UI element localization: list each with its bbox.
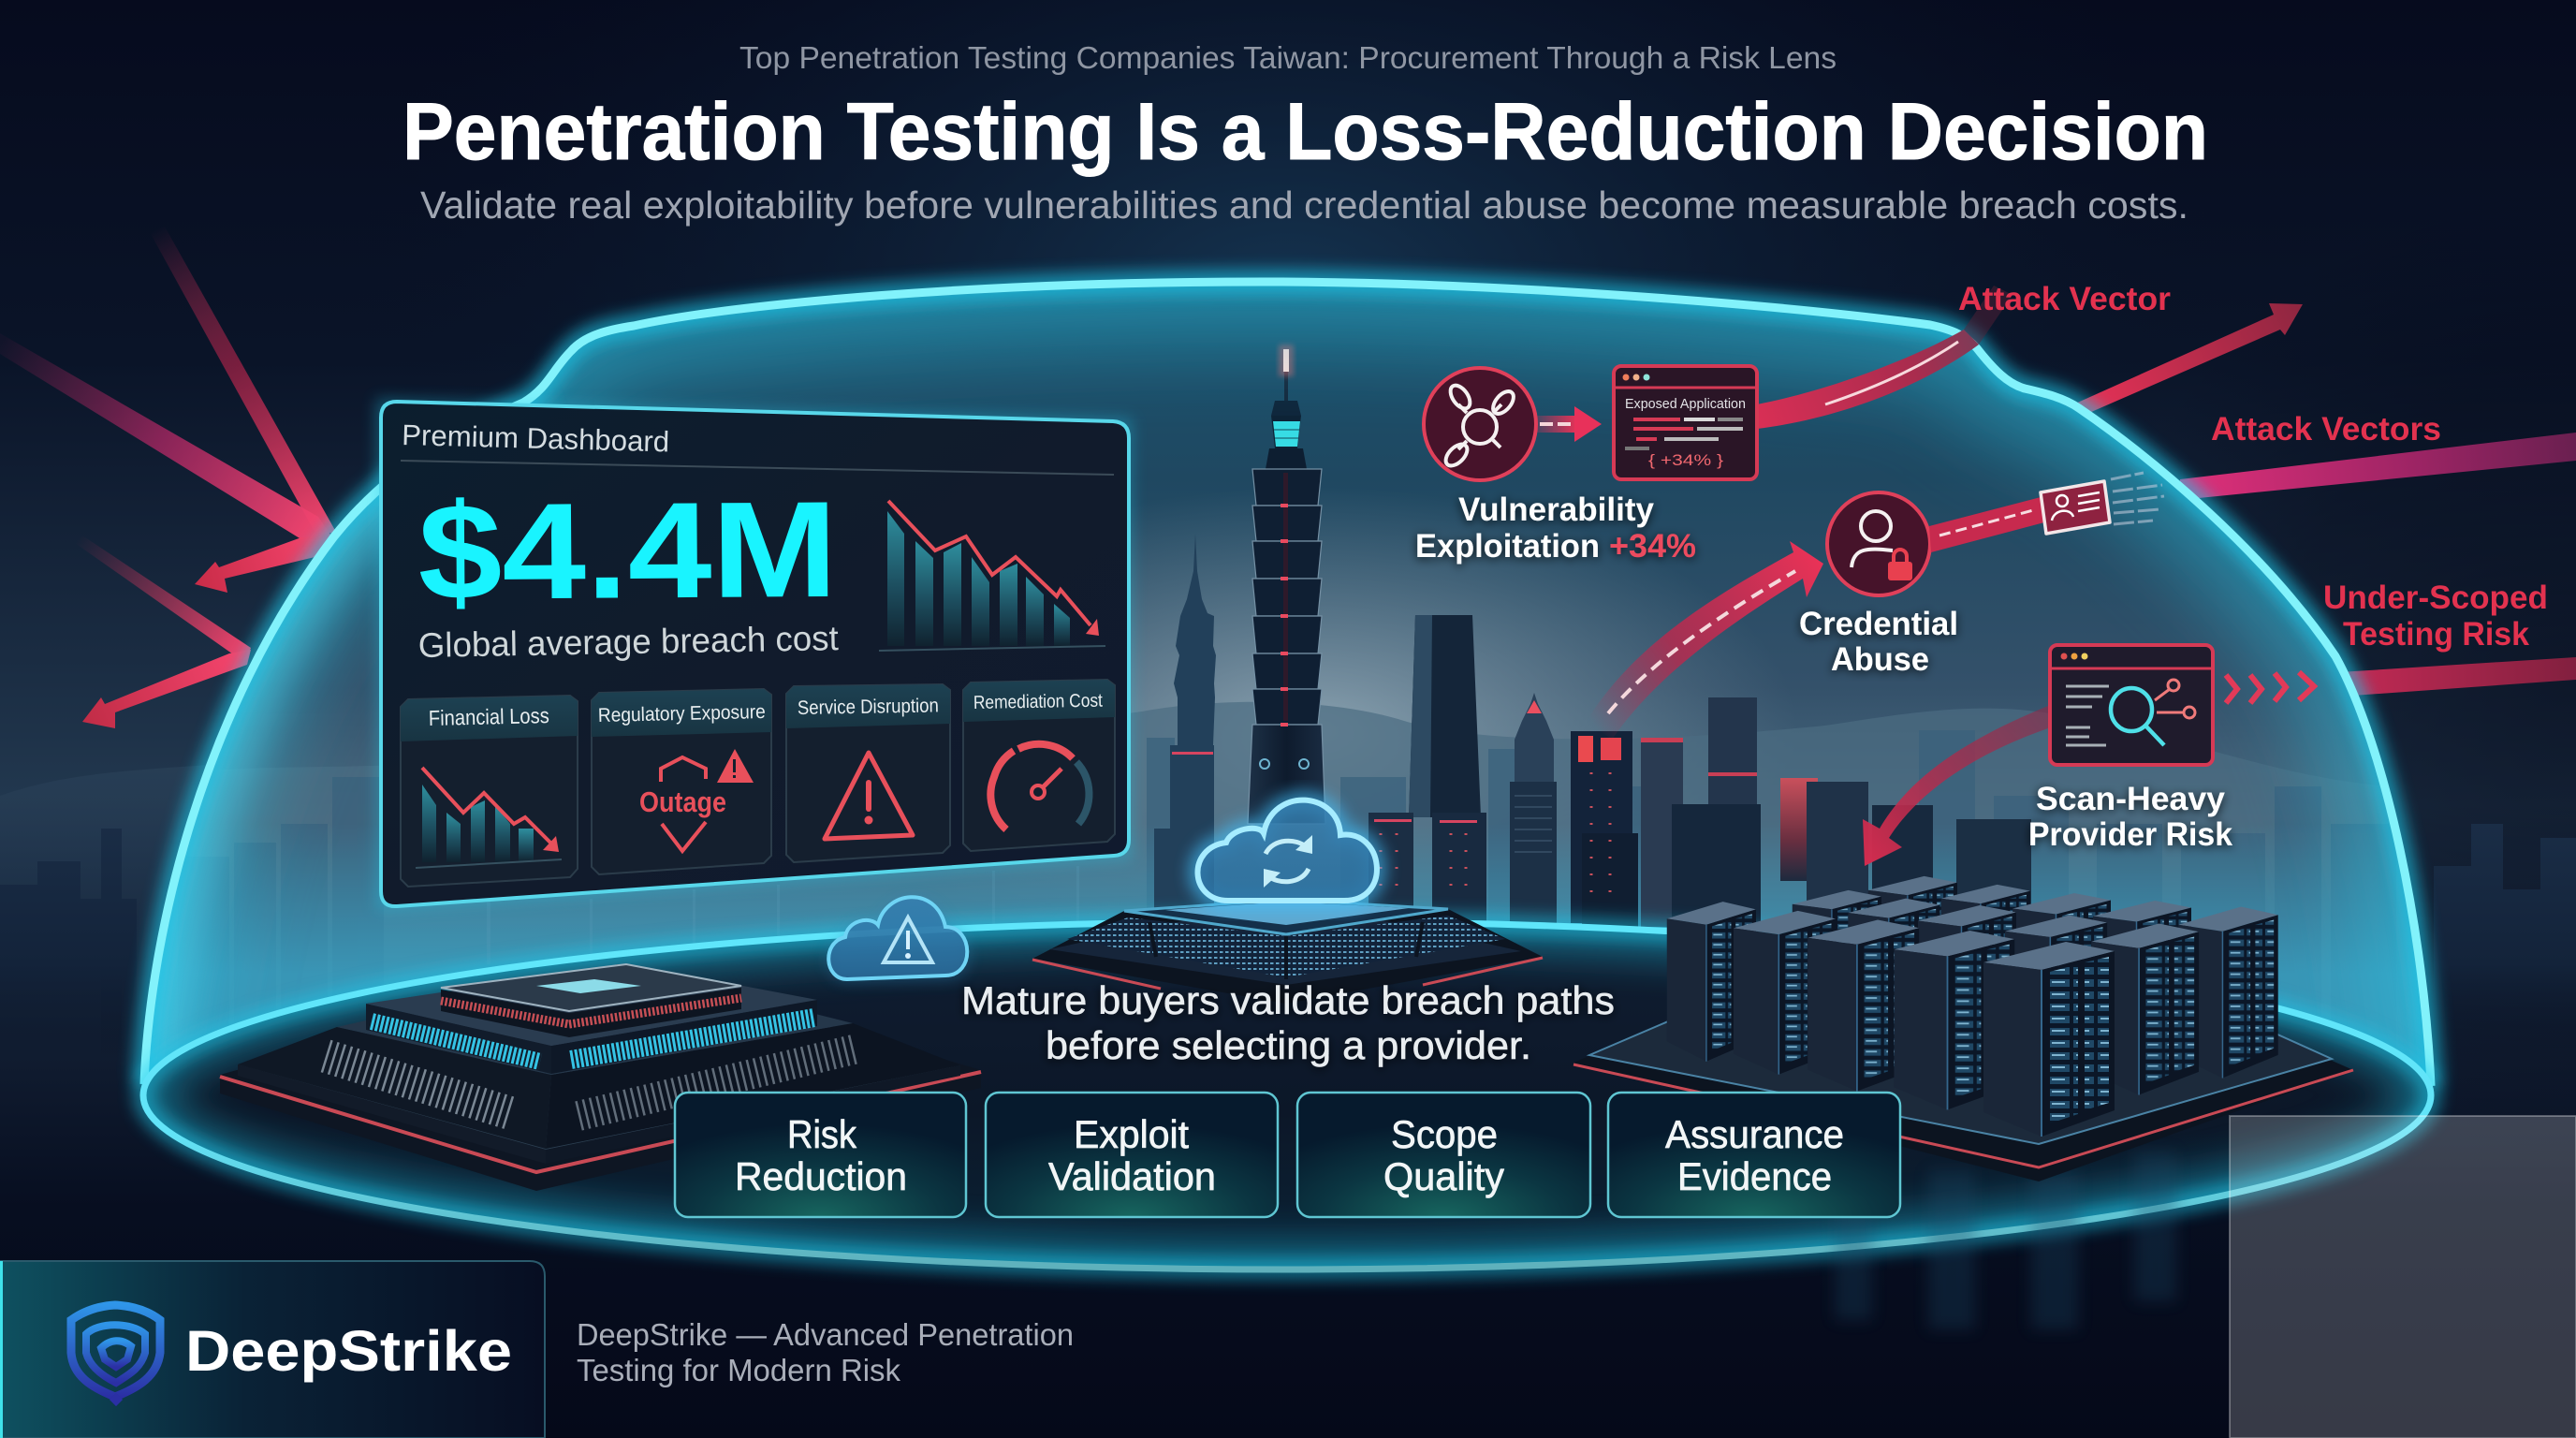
right city buildings bbox=[1368, 615, 2031, 927]
platform: processor chip bbox=[220, 964, 981, 1191]
button: risk reduction: Risk bbox=[787, 1112, 857, 1156]
card: financial loss: Financial Loss bbox=[429, 703, 549, 730]
button: scope quality bbox=[1297, 1093, 1590, 1217]
button: risk reduction: Reduction bbox=[735, 1154, 907, 1198]
button: scope quality: Quality bbox=[1383, 1154, 1504, 1198]
header text bbox=[402, 40, 2208, 227]
card: remediation cost: Remediation Cost bbox=[973, 691, 1103, 713]
label: attack vector: Attack Vector bbox=[1958, 281, 2171, 317]
criteria buttons bbox=[675, 1093, 1900, 1217]
card: regulatory exposure: Regulatory Exposure bbox=[598, 701, 766, 726]
mountains bbox=[1056, 702, 2265, 906]
label: scan-heavy provider risk bbox=[2028, 781, 2233, 853]
logo shield bbox=[71, 1305, 160, 1406]
card: service disruption: Service Disruption bbox=[798, 695, 939, 719]
footer brand panel bbox=[0, 1261, 545, 1438]
pins bbox=[326, 1056, 513, 1114]
right outgoing attack arrows bbox=[2073, 303, 2576, 697]
label: under-scoped testing risk: Testing Risk bbox=[2343, 616, 2530, 653]
label: credential abuse bbox=[1799, 606, 1958, 678]
button: assurance evidence bbox=[1608, 1093, 1900, 1217]
button: assurance evidence: Evidence bbox=[1677, 1154, 1832, 1198]
window: scan-heavy provider bbox=[2050, 645, 2213, 765]
label: scan-heavy provider risk: Provider Risk bbox=[2028, 816, 2233, 853]
label: credential abuse: Abuse bbox=[1831, 641, 1929, 678]
button: exploit validation: Validation bbox=[1048, 1154, 1216, 1198]
button: risk reduction bbox=[675, 1093, 966, 1217]
stream from exposed application bbox=[1757, 286, 2012, 429]
icon: identity card bbox=[2041, 473, 2164, 534]
floor disc bbox=[143, 921, 2431, 1269]
central message: before selecting a provider. bbox=[1046, 1023, 1531, 1067]
central message: Mature buyers validate breach paths bbox=[961, 978, 1615, 1022]
pale columns below dashboard bbox=[487, 866, 1079, 964]
footer description: Testing for Modern Risk bbox=[577, 1353, 900, 1387]
dome outline bbox=[144, 282, 2431, 1086]
big number caption: Global average breach cost bbox=[417, 619, 840, 665]
dome interior with city bbox=[149, 286, 2426, 1073]
arrow: exploitation to application bbox=[1536, 406, 1602, 442]
chevrons bbox=[2226, 672, 2314, 703]
footer description bbox=[577, 1317, 1074, 1387]
main title: Penetration Testing Is a Loss-Reduction Decision bbox=[402, 87, 2208, 177]
icon: credential abuse bbox=[1827, 492, 1930, 595]
glowing sync cloud bbox=[1197, 800, 1377, 901]
labels: attack vectors bbox=[1958, 281, 2548, 653]
arrow: scan provider into servers bbox=[1863, 706, 2048, 866]
left small tower bbox=[1154, 534, 1216, 923]
small warning cloud bbox=[828, 897, 969, 981]
button: scope quality: Scope bbox=[1391, 1112, 1498, 1156]
label: vulnerability exploitation bbox=[1415, 492, 1696, 565]
central message bbox=[961, 978, 1615, 1067]
footer description: DeepStrike — Advanced Penetration bbox=[577, 1317, 1074, 1352]
right side darkening bbox=[2059, 187, 2576, 1161]
background glow bbox=[0, 0, 2576, 655]
arrow: curve to credential abuse bbox=[1587, 541, 1823, 740]
glow behind floor edge bbox=[150, 845, 2426, 1073]
card: regulatory exposure bbox=[592, 689, 771, 874]
eyebrow: Top Penetration Testing Companies Taiwan: Procurement Through a Risk Lens bbox=[739, 40, 1837, 75]
brand name: DeepStrike bbox=[185, 1319, 512, 1383]
platform: central pedestal bbox=[1032, 899, 1543, 1004]
left attack rays and arrows bbox=[0, 227, 337, 728]
label: vulnerability exploitation: Vulnerability bbox=[1458, 492, 1655, 528]
credential stream bbox=[1929, 496, 2044, 552]
window: exposed application: Exposed Application bbox=[1625, 396, 1746, 412]
card: financial loss bbox=[401, 696, 578, 887]
label: vulnerability exploitation: Exploitation bbox=[1415, 528, 1600, 565]
inner edge glow bbox=[144, 282, 2431, 1086]
button: exploit validation bbox=[986, 1093, 1278, 1217]
hazy far buildings bbox=[236, 730, 2374, 902]
chip layer cyan fins bbox=[366, 1004, 551, 1074]
platform: server racks bbox=[1573, 876, 2353, 1181]
trend chart bbox=[879, 501, 1105, 651]
label: scan-heavy provider risk: Scan-Heavy bbox=[2036, 781, 2226, 817]
label: under-scoped testing risk bbox=[2323, 580, 2548, 653]
button: assurance evidence: Assurance bbox=[1665, 1112, 1844, 1156]
card: remediation cost bbox=[963, 680, 1115, 851]
button: exploit validation: Exploit bbox=[1074, 1112, 1189, 1156]
icon: vulnerability exploitation bbox=[1424, 368, 1536, 480]
card: service disruption bbox=[786, 684, 950, 862]
label: under-scoped testing risk: Under-Scoped bbox=[2323, 580, 2548, 616]
label: credential abuse: Credential bbox=[1799, 606, 1958, 642]
big number: $4.4M bbox=[417, 473, 838, 628]
rack reflections under floor rim bbox=[1835, 1152, 2176, 1329]
outer skyline silhouette bbox=[0, 754, 2576, 1063]
chip top bbox=[441, 988, 741, 1037]
Taipei 101 main tower bbox=[1248, 345, 1325, 824]
subtitle: Validate real exploitability before vulnerabilities and credential abuse become measurable breach costs. bbox=[420, 183, 2188, 227]
dashboard heading: Premium Dashboard bbox=[402, 418, 670, 458]
premium dashboard panel bbox=[380, 402, 1129, 906]
card: regulatory exposure: Outage bbox=[639, 785, 726, 818]
translucent corner overlay bbox=[2230, 1116, 2576, 1438]
label: vulnerability exploitation: +34% bbox=[1609, 528, 1696, 565]
window: exposed application bbox=[1614, 366, 1757, 479]
window: exposed application: { +34% } bbox=[1648, 451, 1723, 469]
label: attack vectors: Attack Vectors bbox=[2211, 411, 2441, 448]
